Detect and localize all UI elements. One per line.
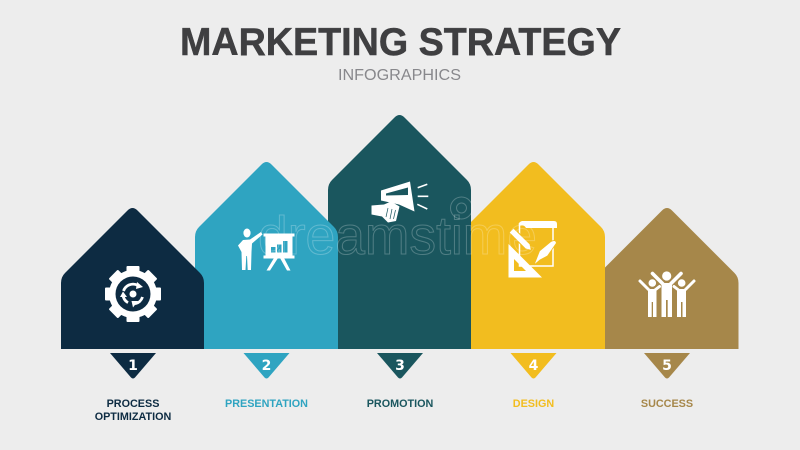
label: promotion: PROMOTION — [367, 398, 433, 410]
title: MARKETING STRATEGY — [180, 21, 621, 64]
number marker 3 — [377, 353, 423, 378]
house shape: success — [596, 208, 738, 349]
icon: celebrating people — [640, 271, 694, 317]
icon: presenter with chart board — [238, 228, 294, 270]
label: process optimization: PROCESS — [107, 398, 159, 410]
panel: process optimization — [61, 208, 204, 423]
panel: presentation — [195, 162, 338, 410]
label: success: SUCCESS — [641, 398, 693, 410]
label: process optimization: OPTIMIZATION — [95, 411, 171, 423]
icon: gear with cycle arrows — [105, 266, 161, 322]
icon: design tools — [508, 221, 557, 278]
number marker 5: 5 — [662, 358, 672, 374]
panel: promotion — [328, 115, 471, 410]
panel: success — [596, 208, 738, 410]
stock watermark: dreamstime — [258, 206, 537, 266]
house shape: design — [462, 162, 605, 349]
number marker 3: 3 — [395, 358, 405, 374]
number marker 1: 1 — [128, 358, 138, 374]
subtitle: INFOGRAPHICS — [338, 67, 461, 84]
label: design: DESIGN — [513, 398, 554, 410]
label: presentation: PRESENTATION — [225, 398, 308, 410]
number marker 5 — [644, 353, 690, 378]
house shape: process optimization — [61, 208, 204, 349]
panel: design — [462, 162, 605, 410]
house shape: promotion — [328, 115, 471, 349]
number marker 2: 2 — [262, 358, 271, 374]
number marker 2 — [244, 353, 290, 378]
number marker 4 — [510, 353, 556, 378]
number marker 1 — [110, 353, 156, 378]
number marker 4: 4 — [529, 358, 539, 374]
icon: megaphone in hand — [372, 182, 428, 222]
house shape: presentation — [195, 162, 338, 349]
